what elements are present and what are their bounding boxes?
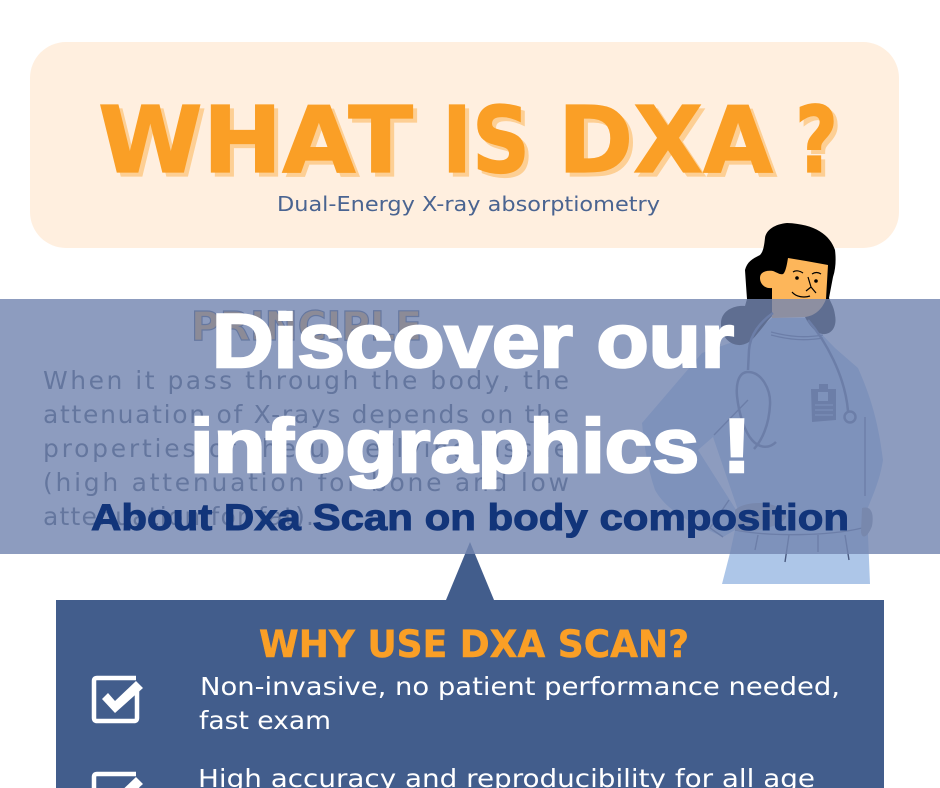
face details — [792, 271, 821, 297]
heading: why use DXA scan: WHY USE DXA SCAN? — [259, 623, 689, 666]
panel: title banner — [30, 42, 899, 248]
overlay heading: infographics ! — [190, 404, 751, 489]
title: what is DXA: WHAT — [98, 87, 413, 194]
title: what is DXA: WHAT — [102, 91, 417, 198]
clipboard — [811, 384, 836, 422]
reason 1: Non-invasive, no patient performance needed, — [200, 672, 840, 701]
overlay band — [0, 299, 940, 554]
section: principle — [43, 304, 569, 531]
face — [760, 258, 828, 318]
overlay subheading: About Dxa Scan on body composition — [91, 497, 849, 538]
stethoscope — [737, 313, 856, 449]
title: what is DXA: DXA — [562, 91, 777, 198]
principle paragraph: When it pass through the body, the — [43, 366, 569, 395]
overlay heading: Discover our — [212, 299, 734, 384]
hand — [735, 503, 873, 537]
illustration: doctor — [642, 223, 883, 584]
icon: checkbox 2 — [94, 774, 143, 788]
panel: why use DXA scan — [56, 542, 884, 788]
icon: checkbox 1 — [94, 678, 143, 721]
title: what is DXA: IS — [446, 91, 534, 198]
hair — [721, 223, 836, 345]
principle paragraph: (high attenuation for bone and low — [43, 468, 569, 497]
reason 1 — [199, 672, 840, 735]
scrub body — [642, 318, 883, 584]
overlay heading — [190, 299, 751, 489]
principle paragraph — [43, 366, 569, 531]
subtitle: dual-energy: Dual-Energy X-ray absorptiometry — [277, 192, 660, 216]
heading: principle: PRINCIPLE — [191, 304, 422, 350]
coat lines — [710, 400, 865, 562]
title: what is DXA: IS — [442, 87, 530, 194]
principle paragraph: attenuation of X-rays depends on the — [43, 400, 569, 429]
arm gap — [698, 437, 740, 516]
reason 1: fast exam — [199, 706, 331, 735]
principle paragraph: properties of the underlying tissue — [43, 434, 569, 463]
title: what is DXA — [98, 87, 842, 198]
callout pointer — [446, 542, 494, 600]
principle paragraph: attenuation for fat). — [43, 502, 314, 531]
title: what is DXA: DXA — [558, 87, 773, 194]
title: what is DXA: ? — [795, 87, 838, 194]
title: what is DXA: ? — [799, 91, 842, 198]
